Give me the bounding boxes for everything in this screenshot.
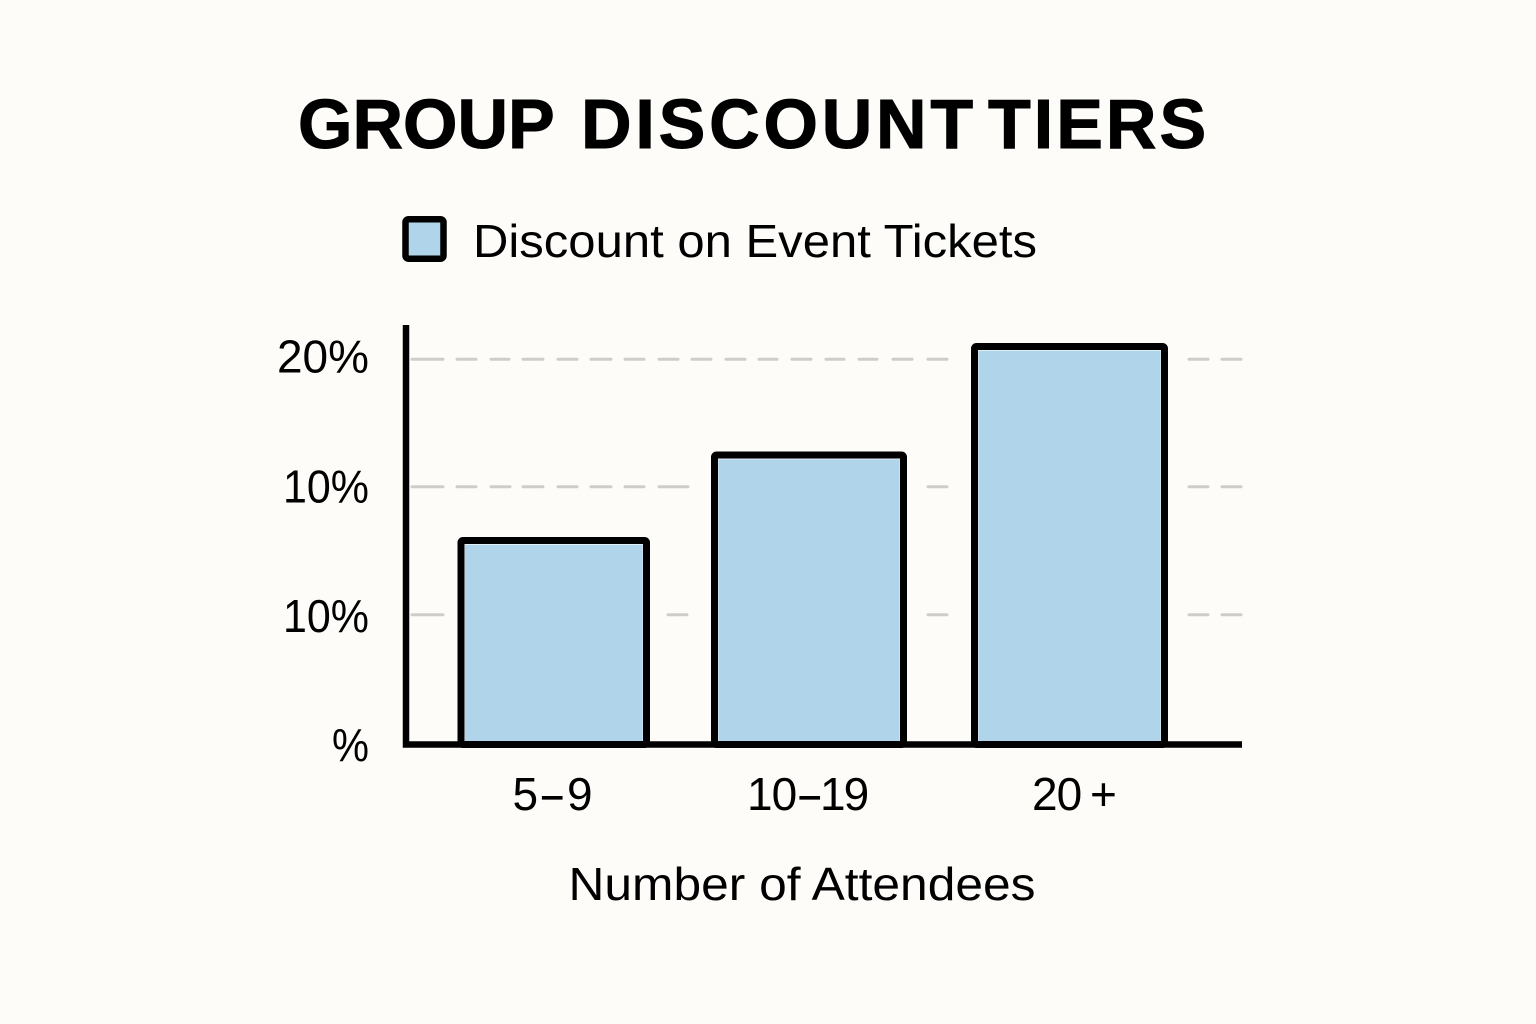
x axis labels: 19 — [820, 768, 868, 820]
x axis labels: – — [542, 776, 562, 815]
title: TIERS — [988, 85, 1209, 163]
x axis title: Number of Attendees — [568, 858, 1036, 910]
y axis labels: 10% — [283, 590, 369, 642]
x axis labels: 5 — [512, 768, 538, 820]
y axis labels: 10% — [283, 460, 369, 512]
x axis labels: – — [800, 776, 820, 815]
bar: 20+ — [974, 346, 1164, 744]
x axis labels — [512, 768, 1117, 820]
x axis labels: 20 — [1032, 768, 1081, 820]
x axis labels: + — [1090, 768, 1117, 820]
bar: 10-19 — [714, 455, 904, 744]
legend label: Discount on Event Tickets — [473, 215, 1037, 267]
title: DISCOUNT — [581, 85, 977, 163]
axes — [406, 325, 1242, 744]
y axis labels: 20% — [277, 330, 369, 382]
y axis labels — [277, 330, 369, 771]
title: GROUP — [298, 85, 553, 163]
x axis labels: 9 — [567, 768, 593, 820]
legend — [406, 215, 1037, 267]
y axis labels: % — [332, 719, 369, 771]
bar: 5-9 — [461, 540, 646, 744]
x axis labels: 10 — [747, 768, 796, 820]
legend swatch — [406, 219, 444, 259]
